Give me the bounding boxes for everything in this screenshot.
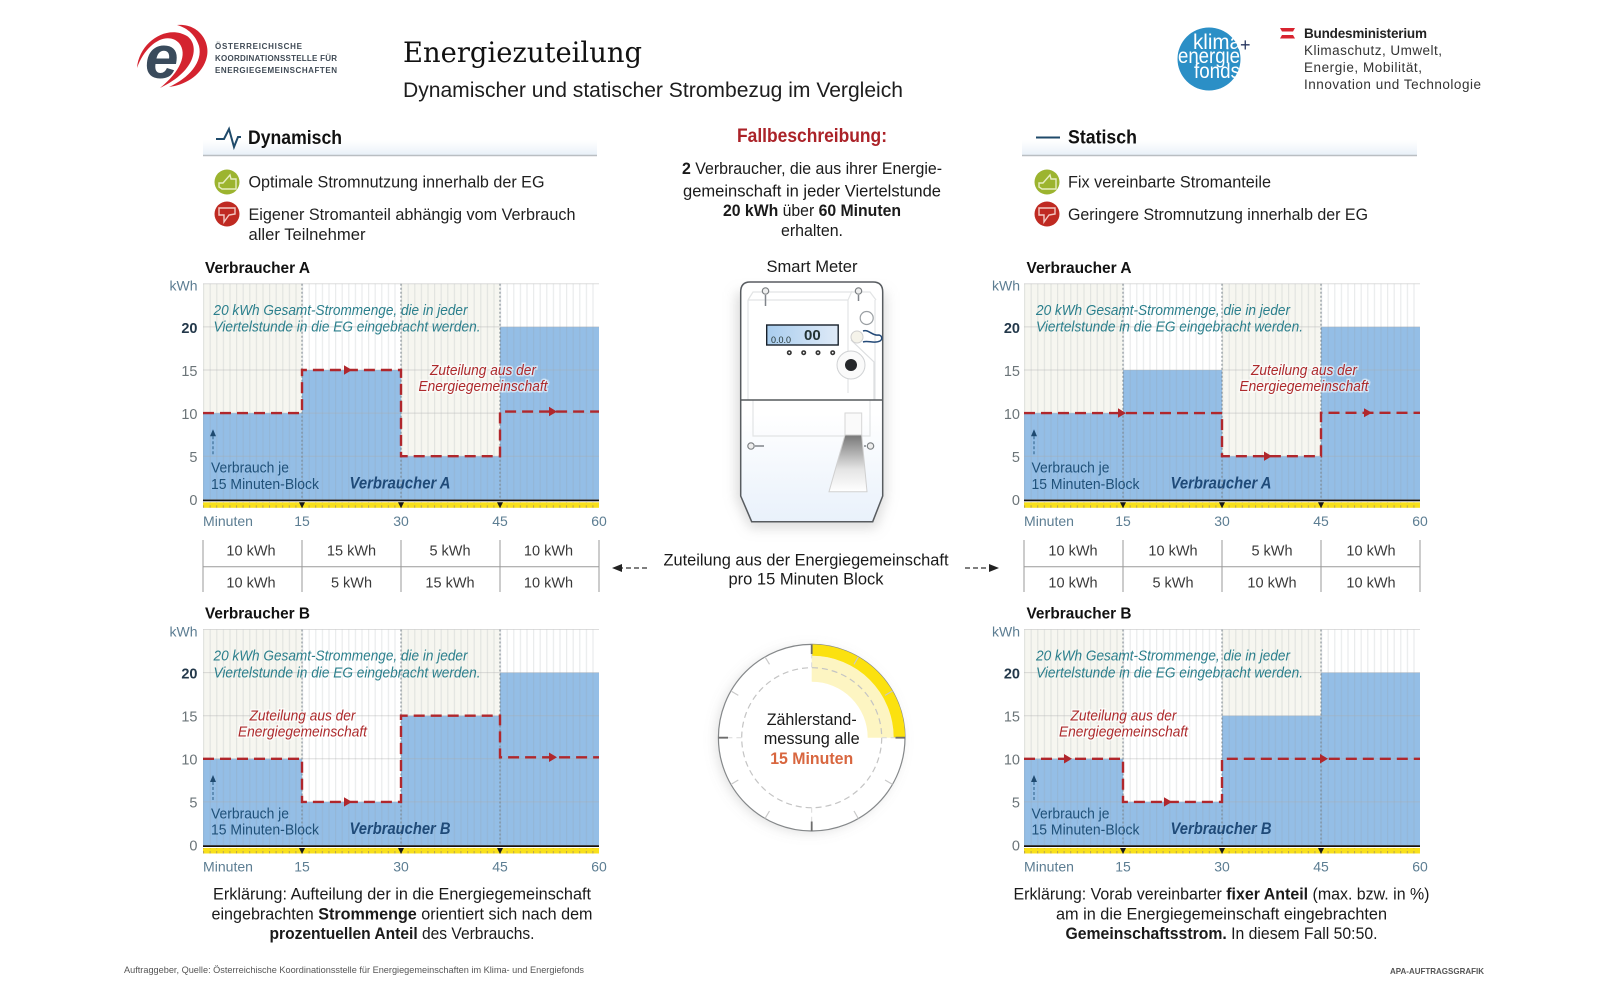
annotation: total: Viertelstunde in die EG eingebracht werden. — [214, 320, 480, 336]
y axis: 5 — [1012, 796, 1020, 812]
y axis — [170, 278, 198, 509]
case description: 2 Verbraucher, die aus ihrer Energie- — [682, 159, 942, 178]
annotation: total — [213, 649, 480, 681]
table: Dynamisch values: 15 kWh — [425, 576, 475, 592]
illustration: metering clock — [716, 644, 905, 832]
heading: Statisch: Statisch — [1068, 128, 1137, 148]
case description: gemeinschaft in jeder Viertelstunde — [683, 182, 941, 200]
logo: Klima- und Energiefonds: + — [1240, 35, 1251, 55]
x axis: 45 — [492, 513, 508, 529]
y axis: kWh — [992, 623, 1020, 639]
credit: APA-AUFTRAGSGRAFIK — [1390, 966, 1485, 976]
y axis: 0 — [189, 839, 198, 855]
arrow: consumption — [1031, 775, 1037, 800]
logo: Bundesministerium: Klimaschutz, Umwelt, — [1304, 43, 1442, 58]
logo: Österreichische Koordinationsstelle — [137, 24, 337, 91]
x axis: 15 — [294, 513, 310, 529]
x axis: 60 — [591, 859, 607, 875]
clock text: 15 Minuten — [770, 749, 853, 768]
logo: Klima- und Energiefonds — [1178, 28, 1251, 90]
x axis — [1024, 859, 1428, 875]
center label: allocation per block: pro 15 Minuten Block — [728, 570, 884, 588]
logo: Klima- und Energiefonds: energie — [1178, 45, 1240, 68]
table: Statisch values: 10 kWh — [1247, 576, 1297, 592]
table: Statisch values: 5 kWh — [1152, 576, 1194, 592]
meter port — [837, 351, 865, 379]
baseline time strip — [203, 500, 599, 508]
logo: Bundesministerium — [1280, 26, 1481, 92]
chart: Dynamisch Verbraucher A — [170, 260, 607, 529]
x axis — [203, 513, 607, 529]
bar label: Verbraucher B — [350, 819, 450, 838]
annotation: allocation — [418, 363, 548, 395]
annotation: allocation: Energiegemeinschaft — [1059, 725, 1189, 741]
icon: thumbs down — [1034, 202, 1060, 226]
annotation: allocation: Energiegemeinschaft — [1240, 379, 1369, 395]
annotation: consumption: Verbrauch je — [1032, 461, 1110, 477]
allocation line — [1024, 408, 1420, 461]
y axis: 10 — [1004, 753, 1020, 769]
x axis: 30 — [1214, 859, 1230, 875]
annotation: allocation — [1240, 363, 1369, 395]
pros and cons: Statisch — [1034, 170, 1368, 226]
icon: wireless wave — [863, 331, 882, 342]
explanation: Dynamisch — [212, 884, 592, 943]
x axis: 15 — [1115, 513, 1131, 529]
annotation: total — [1035, 649, 1303, 681]
arrow: to left table — [612, 564, 647, 572]
explanation: Statisch: am in die Energiegemeinschaft eingebrachten — [1056, 904, 1387, 924]
table: Statisch values: 10 kWh — [1346, 544, 1396, 560]
x axis: 60 — [1412, 859, 1428, 875]
y axis — [992, 278, 1020, 509]
x axis: 30 — [393, 859, 409, 875]
annotation: consumption — [211, 806, 320, 839]
panel header: Dynamisch — [203, 128, 597, 156]
table: Dynamisch values: 5 kWh — [331, 576, 372, 592]
explanation: Statisch — [1014, 884, 1430, 943]
logo: Österreichische Koordinationsstelle: e — [145, 24, 178, 91]
arrow: consumption — [1031, 429, 1037, 454]
chart: Dynamisch Verbraucher B — [170, 606, 607, 875]
section label: Verbraucher B — [205, 606, 310, 623]
baseline time strip — [203, 845, 599, 854]
y axis: 0 — [189, 493, 198, 509]
annotation: total: 20 kWh Gesamt-Strommenge, die in jeder — [1035, 649, 1291, 665]
arrow: to right table — [965, 564, 999, 572]
pros and cons: Statisch: Fix vereinbarte Stromanteile — [1068, 172, 1271, 192]
case description: 20 kWh über 60 Minuten — [723, 201, 901, 220]
label: Smart Meter: Smart Meter — [766, 257, 858, 276]
consumption bars — [203, 673, 599, 845]
consumption bars — [1024, 673, 1420, 845]
annotation: total — [213, 303, 480, 336]
annotation: total: Viertelstunde in die EG eingebracht werden. — [214, 665, 480, 681]
icon: thumbs up — [1034, 170, 1060, 194]
annotation: total: Viertelstunde in die EG eingebracht werden. — [1036, 665, 1303, 681]
icon: pulse line — [216, 129, 241, 147]
panel header: Statisch — [1022, 128, 1417, 156]
y axis — [992, 623, 1020, 855]
clock text — [764, 710, 860, 768]
y axis: kWh — [170, 278, 198, 294]
logo: Bundesministerium: Energie, Mobilität, — [1304, 60, 1422, 75]
highlighted quarter — [812, 644, 905, 738]
chart: Statisch Verbraucher A — [992, 260, 1428, 529]
annotation: consumption: Verbrauch je — [211, 461, 289, 477]
meter display: 00 — [804, 327, 821, 344]
y axis: 20 — [181, 667, 198, 683]
annotation: allocation: Energiegemeinschaft — [418, 379, 548, 395]
logo: Klima- und Energiefonds: klima — [1193, 31, 1241, 54]
y axis: 10 — [181, 407, 198, 423]
heading: Dynamisch: Dynamisch — [248, 128, 342, 149]
annotation: consumption — [1032, 806, 1140, 839]
y axis: kWh — [992, 278, 1020, 294]
y axis: 5 — [189, 796, 198, 812]
y axis: 15 — [181, 710, 198, 726]
case description: erhalten. — [781, 221, 843, 240]
annotation: consumption — [1032, 461, 1140, 493]
pros and cons: Dynamisch: Optimale Stromnutzung innerhalb der EG — [248, 172, 544, 192]
y axis: 10 — [181, 753, 198, 769]
annotation: total: Viertelstunde in die EG eingebracht werden. — [1036, 320, 1303, 336]
allocation line — [1024, 754, 1420, 807]
x axis: 60 — [591, 513, 607, 529]
annotation: allocation: Zuteilung aus der — [1070, 709, 1178, 725]
pros and cons: Dynamisch: aller Teilnehmer — [248, 225, 366, 244]
bar label: Verbraucher B — [1170, 819, 1272, 838]
table: Dynamisch values: 15 kWh — [327, 544, 376, 560]
x axis: Minuten — [1024, 513, 1074, 529]
x axis: 15 — [1115, 859, 1131, 875]
table: Statisch values: 10 kWh — [1148, 544, 1198, 560]
annotation: consumption: Verbrauch je — [211, 806, 289, 822]
case description — [682, 126, 942, 240]
bar label: Verbraucher A — [1170, 473, 1272, 492]
x axis: 45 — [1313, 859, 1329, 875]
icon: thumbs down — [214, 202, 240, 226]
y axis: 5 — [189, 450, 198, 466]
clock text: messung alle — [764, 729, 860, 748]
annotation: allocation: Zuteilung aus der — [249, 709, 357, 725]
table: Statisch values: 5 kWh — [1251, 544, 1293, 560]
logo: Österreichische Koordinationsstelle: KOORDINATIONSSTELLE FÜR — [215, 54, 337, 63]
arrow: consumption — [210, 429, 216, 454]
arrow: consumption — [210, 775, 216, 800]
annotation: total: 20 kWh Gesamt-Strommenge, die in jeder — [213, 303, 469, 319]
x axis — [203, 859, 607, 875]
table: Statisch values: 10 kWh — [1346, 576, 1396, 592]
y axis: 5 — [1012, 450, 1020, 466]
table: Statisch values: 10 kWh — [1048, 544, 1098, 560]
annotation: allocation: Zuteilung aus der — [1250, 363, 1358, 379]
illustration: smart meter — [736, 282, 886, 528]
pros and cons: Statisch: Geringere Stromnutzung innerhalb der EG — [1068, 205, 1368, 224]
source note: Auftraggeber, Quelle: Österreichische Koordinationsstelle für Energiegemeinschaften im Klima- und Energiefonds — [124, 965, 584, 976]
y axis: 20 — [1004, 667, 1020, 683]
table: Dynamisch values — [203, 540, 599, 592]
logo: Österreichische Koordinationsstelle: ÖSTERREICHISCHE — [215, 42, 303, 51]
annotation: consumption: 15 Minuten-Block — [211, 477, 320, 493]
logo: Klima- und Energiefonds: fonds — [1194, 60, 1240, 83]
explanation: Statisch: Erklärung: Vorab vereinbarter fixer Anteil (max. bzw. in %) — [1014, 884, 1430, 904]
annotation: consumption: 15 Minuten-Block — [211, 823, 320, 839]
section label: Verbraucher B — [1026, 606, 1132, 623]
allocation line — [203, 365, 599, 456]
clock text: Zählerstand- — [767, 710, 857, 729]
table: Dynamisch values: 5 kWh — [429, 544, 471, 560]
annotation: consumption: Verbrauch je — [1032, 806, 1110, 822]
icon: flat line — [1036, 136, 1060, 138]
table: Statisch values: 10 kWh — [1048, 576, 1098, 592]
annotation: consumption — [211, 461, 320, 493]
logo: Bundesministerium: Bundesministerium — [1304, 26, 1427, 41]
case description: Fallbeschreibung: — [737, 126, 887, 147]
annotation: total — [1035, 303, 1303, 336]
center label: allocation per block: Zuteilung aus der Energiegemeinschaft — [664, 550, 949, 570]
table: Dynamisch values: 10 kWh — [524, 544, 573, 560]
annotation: allocation — [238, 709, 368, 741]
x axis — [1024, 513, 1428, 529]
pros and cons: Dynamisch — [214, 170, 576, 244]
annotation: allocation — [1059, 709, 1189, 741]
y axis: 20 — [181, 321, 198, 337]
consumption bars — [203, 327, 599, 499]
x axis: 60 — [1412, 513, 1428, 529]
logo: Bundesministerium: Innovation und Technologie — [1304, 77, 1481, 92]
y axis: 15 — [181, 364, 198, 380]
x axis: 30 — [1214, 513, 1230, 529]
explanation: Dynamisch: Erklärung: Aufteilung der in die Energiegemeinschaft — [213, 884, 591, 904]
annotation: total: 20 kWh Gesamt-Strommenge, die in jeder — [213, 649, 469, 665]
x axis: 45 — [1313, 513, 1329, 529]
explanation: Dynamisch: prozentuellen Anteil des Verbrauchs. — [270, 924, 534, 943]
meter display: 0.0.0 — [771, 335, 791, 345]
section label: Verbraucher A — [1026, 260, 1132, 277]
pros and cons: Dynamisch: Eigener Stromanteil abhängig vom Verbrauch — [248, 205, 576, 224]
y axis: 15 — [1004, 710, 1020, 726]
annotation: allocation: Energiegemeinschaft — [238, 725, 368, 741]
consumption bars — [1024, 327, 1420, 499]
title: Energiezuteilung — [403, 36, 642, 69]
section label: Verbraucher A — [205, 260, 310, 277]
annotation: total: 20 kWh Gesamt-Strommenge, die in jeder — [1035, 303, 1291, 319]
meter screws — [748, 288, 874, 449]
table: Dynamisch values: 10 kWh — [226, 576, 276, 592]
x axis: Minuten — [1024, 859, 1074, 875]
y axis: 0 — [1012, 493, 1020, 509]
explanation: Statisch: Gemeinschaftsstrom. In diesem Fall 50:50. — [1066, 924, 1378, 943]
icon: thumbs up — [214, 170, 240, 194]
chart: Statisch Verbraucher B — [992, 606, 1428, 875]
y axis: kWh — [170, 623, 198, 639]
subtitle: Dynamischer und statischer Strombezug im Vergleich — [403, 79, 903, 102]
x axis: 30 — [393, 513, 409, 529]
annotation: consumption: 15 Minuten-Block — [1032, 477, 1140, 493]
y axis: 15 — [1004, 364, 1020, 380]
baseline time strip — [1024, 500, 1420, 508]
center label: allocation per block — [664, 550, 949, 588]
x axis: Minuten — [203, 859, 253, 875]
y axis: 0 — [1012, 839, 1020, 855]
table: Statisch values — [1024, 540, 1420, 592]
annotation: allocation: Zuteilung aus der — [429, 363, 537, 379]
meter terminal — [829, 413, 867, 492]
bar label: Verbraucher A — [350, 473, 450, 492]
y axis — [170, 623, 198, 855]
x axis: 45 — [492, 859, 508, 875]
baseline time strip — [1024, 845, 1420, 854]
meter display — [767, 325, 838, 345]
x axis: 15 — [294, 859, 310, 875]
y axis: 20 — [1004, 321, 1020, 337]
allocation line — [203, 716, 599, 807]
table: Dynamisch values: 10 kWh — [524, 576, 573, 592]
logo: Österreichische Koordinationsstelle: ENERGIEGEMEINSCHAFTEN — [215, 66, 337, 75]
x axis: Minuten — [203, 513, 253, 529]
explanation: Dynamisch: eingebrachten Strommenge orientiert sich nach dem — [212, 904, 592, 924]
y axis: 10 — [1004, 407, 1020, 423]
table: Dynamisch values: 10 kWh — [226, 544, 276, 560]
meter buttons — [788, 351, 834, 354]
annotation: consumption: 15 Minuten-Block — [1032, 823, 1140, 839]
